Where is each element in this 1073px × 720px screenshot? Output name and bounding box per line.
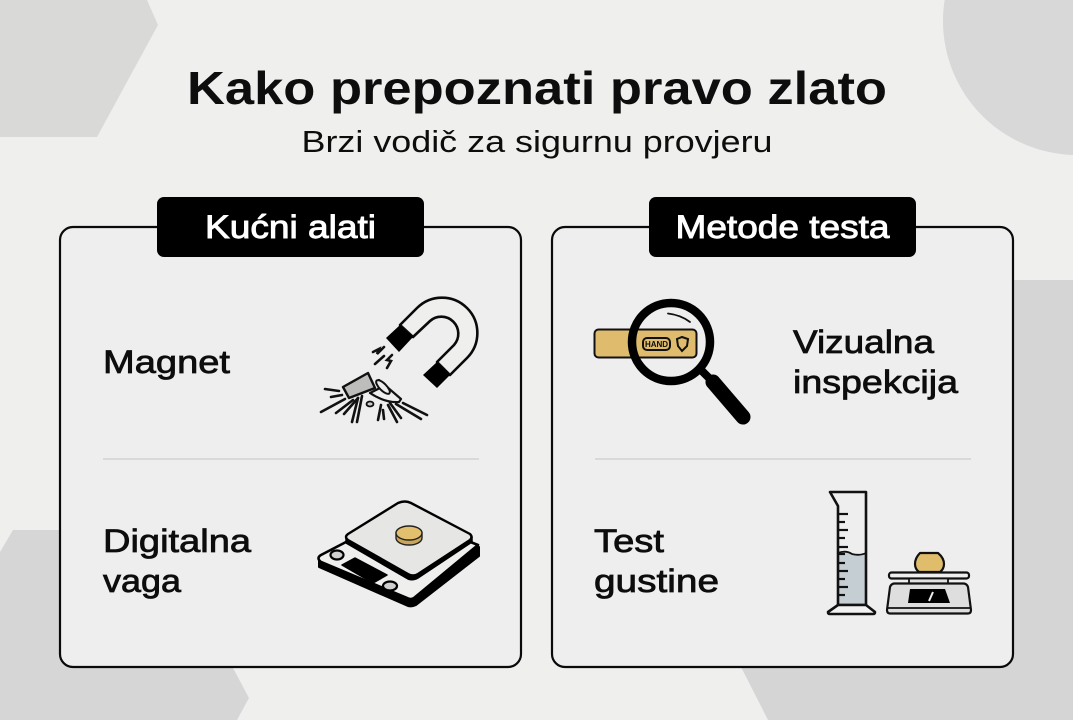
background shape: top-right circle [943, 0, 1073, 155]
background shape: top-left hexagon [0, 0, 158, 137]
icon: graduated cylinder [828, 492, 875, 614]
panel: Kućni alati [60, 197, 521, 667]
label: Test gustine: Test [594, 523, 664, 559]
label: Vizualna inspekcija: inspekcija [793, 364, 958, 400]
label: Digitalna vaga: Digitalna [103, 523, 251, 559]
icon: digital scale with gold coin [318, 502, 479, 606]
label: Magnet: Magnet [103, 344, 230, 380]
icon: horseshoe magnet attracting metal pieces [321, 298, 477, 422]
subtitle: Brzi vodič za sigurnu provjeru [302, 124, 772, 159]
divider [595, 458, 971, 460]
panel heading: Metode testa: Metode testa [676, 209, 890, 245]
title: Kako prepoznati pravo zlato [187, 62, 887, 114]
background shape: bottom-left hexagon [0, 530, 249, 720]
label: Test gustine: gustine [594, 563, 719, 599]
panel: Metode testa [552, 197, 1013, 667]
panel frame [60, 227, 521, 667]
icon: magnifier over gold bar hallmark [594, 303, 743, 417]
icon: balance scale with gold sample [887, 553, 971, 614]
panel heading: Kućni alati [157, 197, 424, 257]
label: Digitalna vaga: vaga [103, 563, 181, 599]
panel heading: Kućni alati: Kućni alati [205, 209, 376, 245]
icon: magnifier over gold bar hallmark: HAND [645, 340, 668, 349]
panel heading: Metode testa [649, 197, 916, 257]
label: Vizualna inspekcija: Vizualna [793, 324, 934, 360]
background shape: right block [740, 280, 1073, 720]
panel frame [552, 227, 1013, 667]
divider [103, 458, 479, 460]
